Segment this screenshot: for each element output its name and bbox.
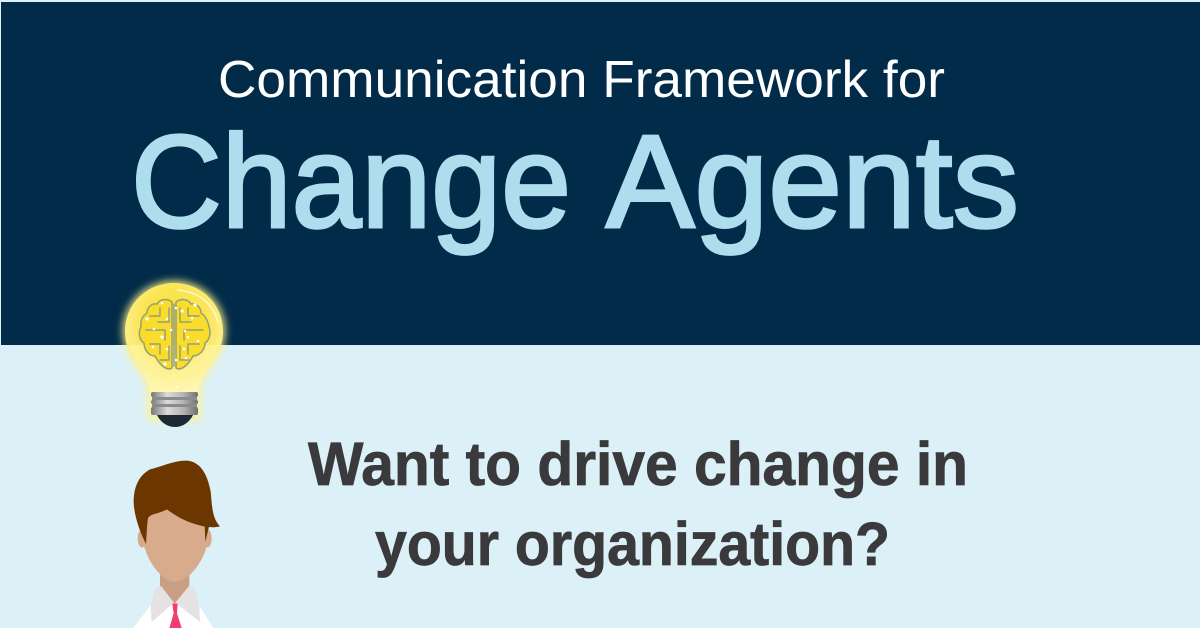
headline: Want to drive change in your organization? [308,430,968,578]
neck [160,573,189,604]
headline: Want to drive change in your organization?: your organization? [375,510,890,578]
icon: light bulb with brain [125,283,223,427]
glass highlight [178,290,218,322]
header band: navy [1,2,1200,345]
hair [134,461,220,544]
title: Change Agents: Agents [606,108,1019,255]
shirt [133,604,213,628]
collar left [151,586,174,622]
headline: Want to drive change in your organization?: Want to drive change in [308,430,968,498]
face [143,507,207,582]
screw base [151,392,198,397]
tie [169,604,182,628]
figure: man with brown hair and pink tie [133,461,220,628]
bulb contact cap [157,415,193,427]
collar right [175,586,200,622]
ears [138,529,146,547]
title line: Communication Framework for: Communication Framework for [218,51,945,109]
lower glass tint [129,345,219,392]
title: Change Agents [131,108,1019,255]
brain outline [139,300,210,369]
title: Change Agents: Change [131,108,571,255]
hair sideburn [205,525,209,542]
brain sparkles [145,302,199,388]
